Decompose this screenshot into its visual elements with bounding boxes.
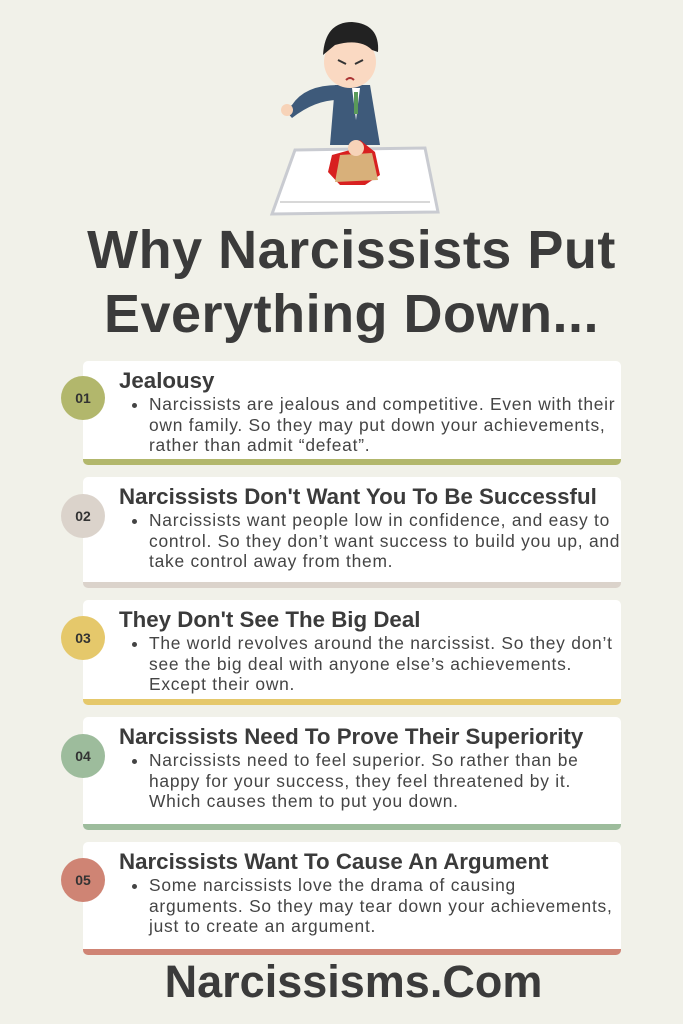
badge 02: 02	[75, 508, 91, 524]
panel: 03: Except their own.	[149, 674, 295, 694]
title	[87, 220, 616, 344]
title: Everything Down...	[104, 284, 599, 344]
panel: 05: arguments. So they may tear down your achievements,	[149, 896, 613, 916]
panel: 02	[83, 477, 621, 588]
panel: 04: happy for your success, they feel threatened by it.	[149, 770, 571, 790]
panel: 01 jealousy	[83, 361, 621, 465]
panel: 02: control. So they don’t want success to build you up, and	[149, 530, 620, 550]
panel: 05: just to create an argument.	[149, 916, 376, 936]
body	[281, 85, 380, 145]
badge 03	[61, 616, 105, 660]
title: Why Narcissists Put	[87, 220, 616, 280]
badge 02	[61, 494, 105, 538]
panel: 02: Narcissists Don't Want You To Be Successful	[119, 484, 597, 509]
panel: 03: see the big deal with anyone else’s achievements.	[149, 654, 572, 674]
head	[323, 22, 378, 88]
panel: 03	[83, 600, 621, 705]
panel: 04: Narcissists need to feel superior. So rather than be	[149, 750, 579, 770]
footer: Narcissisms.Com	[165, 956, 542, 1007]
panel: 05	[83, 842, 621, 955]
stamp	[328, 140, 380, 185]
badge 04: 04	[75, 748, 91, 764]
badge 03: 03	[75, 630, 91, 646]
panel: 03: They Don't See The Big Deal	[119, 607, 420, 632]
badge 01	[61, 376, 105, 420]
panel: 02: take control away from them.	[149, 551, 393, 571]
panel: 05: Narcissists Want To Cause An Argument	[119, 849, 548, 874]
panel: 04: Narcissists Need To Prove Their Superiority	[119, 724, 583, 749]
panel: 01 jealousy: Narcissists are jealous and competitive. Even with their	[149, 394, 615, 414]
panel: 02: Narcissists want people low in confidence, and easy to	[149, 510, 610, 530]
table	[272, 148, 438, 214]
badge 05	[61, 858, 105, 902]
panel: 01 jealousy: rather than admit “defeat”.	[149, 435, 370, 455]
panel: 01 jealousy: own family. So they may put down your achievements,	[149, 414, 605, 434]
illustration: angry man stamping	[270, 22, 440, 216]
panel: 04: Which causes them to put you down.	[149, 791, 459, 811]
panel: 04	[83, 717, 621, 830]
panel: 03: The world revolves around the narcissist. So they don’t	[149, 633, 613, 653]
panel: 01 jealousy: Jealousy	[119, 368, 214, 393]
panel: 05: Some narcissists love the drama of causing	[149, 875, 516, 895]
badge 01: 01	[75, 390, 91, 406]
badge 05: 05	[75, 872, 91, 888]
badge 04	[61, 734, 105, 778]
